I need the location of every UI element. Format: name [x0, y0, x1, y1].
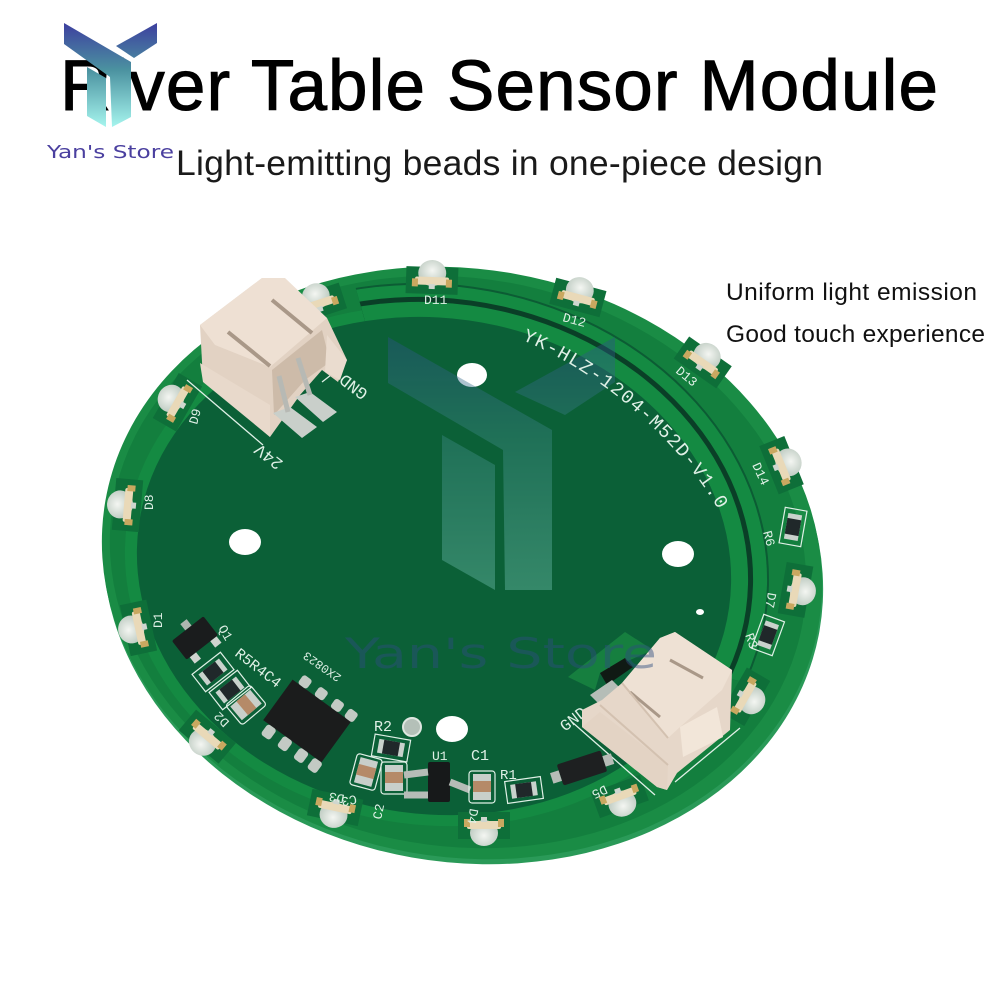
LED silk labels	[142, 293, 779, 825]
watermark logo	[388, 337, 615, 590]
sensor module circuit board photo: 2X0823	[301, 648, 344, 684]
right side resistors	[779, 507, 807, 547]
Q1 transistor	[167, 610, 223, 666]
connector pads and pins top left	[273, 358, 337, 438]
sensor module circuit board photo: R3	[741, 631, 761, 651]
LED silk labels: D13	[672, 364, 700, 390]
logo mark	[64, 23, 157, 127]
board version label	[522, 340, 722, 516]
main dark copper area	[104, 279, 764, 853]
feature list	[726, 279, 985, 348]
Q15 diode	[548, 748, 616, 788]
upper right grooves and bands	[356, 283, 769, 680]
LED silk labels: D7	[761, 591, 779, 609]
store logo	[46, 23, 174, 163]
sensor module circuit board photo: C2	[370, 802, 388, 821]
sensor module circuit board photo: R6	[759, 529, 778, 548]
board top surface	[54, 211, 870, 915]
LED silk labels: D14	[748, 460, 772, 488]
LED silk labels: D8	[142, 494, 157, 510]
LED silk labels: D2	[211, 708, 233, 730]
feature: uniform light: Uniform light emission	[726, 279, 977, 306]
LED silk labels: D4	[463, 807, 481, 825]
sensor module circuit board photo	[102, 260, 824, 864]
LED silk labels: D3	[328, 788, 346, 806]
watermark text: Yan's Store	[344, 629, 657, 678]
sensor module circuit board photo: U1	[432, 749, 448, 764]
R2 via C2 C3 U1 C1 R1	[371, 734, 411, 762]
sensor module circuit board photo: Q1	[215, 622, 235, 644]
LED silk labels: D5	[589, 781, 610, 802]
sensor module circuit board photo: R1	[500, 768, 517, 784]
connector silk lines top left	[187, 355, 340, 445]
sensor module circuit board photo: C3	[340, 791, 358, 809]
LEDs	[105, 259, 820, 846]
LED silk labels: D12	[561, 310, 587, 331]
R5 R4 C4 group	[192, 652, 234, 692]
connector 24V / GND	[200, 278, 347, 437]
sensor module circuit board photo: GND	[557, 704, 591, 736]
feature: touch: Good touch experience	[726, 321, 985, 348]
board edge thickness	[55, 216, 871, 920]
title: River Table Sensor Module	[60, 47, 938, 126]
sensor module circuit board photo: 24V	[251, 438, 288, 472]
mounting holes	[229, 363, 704, 742]
sensor module circuit board photo: YK-HLZ-1204-M52D-V1.0	[526, 328, 728, 507]
lower band	[91, 266, 777, 866]
sensor module circuit board photo: R2	[374, 719, 392, 736]
main chip	[256, 671, 359, 774]
sensor module circuit board photo: C1	[471, 748, 489, 765]
store name: Yan's Store	[46, 142, 174, 163]
sensor module circuit board photo: GND	[337, 368, 373, 402]
green patch and lower right connector	[568, 632, 653, 690]
subtitle: Light-emitting beads in one-piece design	[176, 143, 823, 183]
sensor module circuit board photo: R5R4C4	[231, 646, 284, 692]
outer rim ring	[64, 222, 852, 902]
LED silk labels: D9	[186, 407, 205, 426]
LED silk labels: D11	[424, 293, 448, 308]
LED silk labels: D1	[151, 612, 166, 628]
